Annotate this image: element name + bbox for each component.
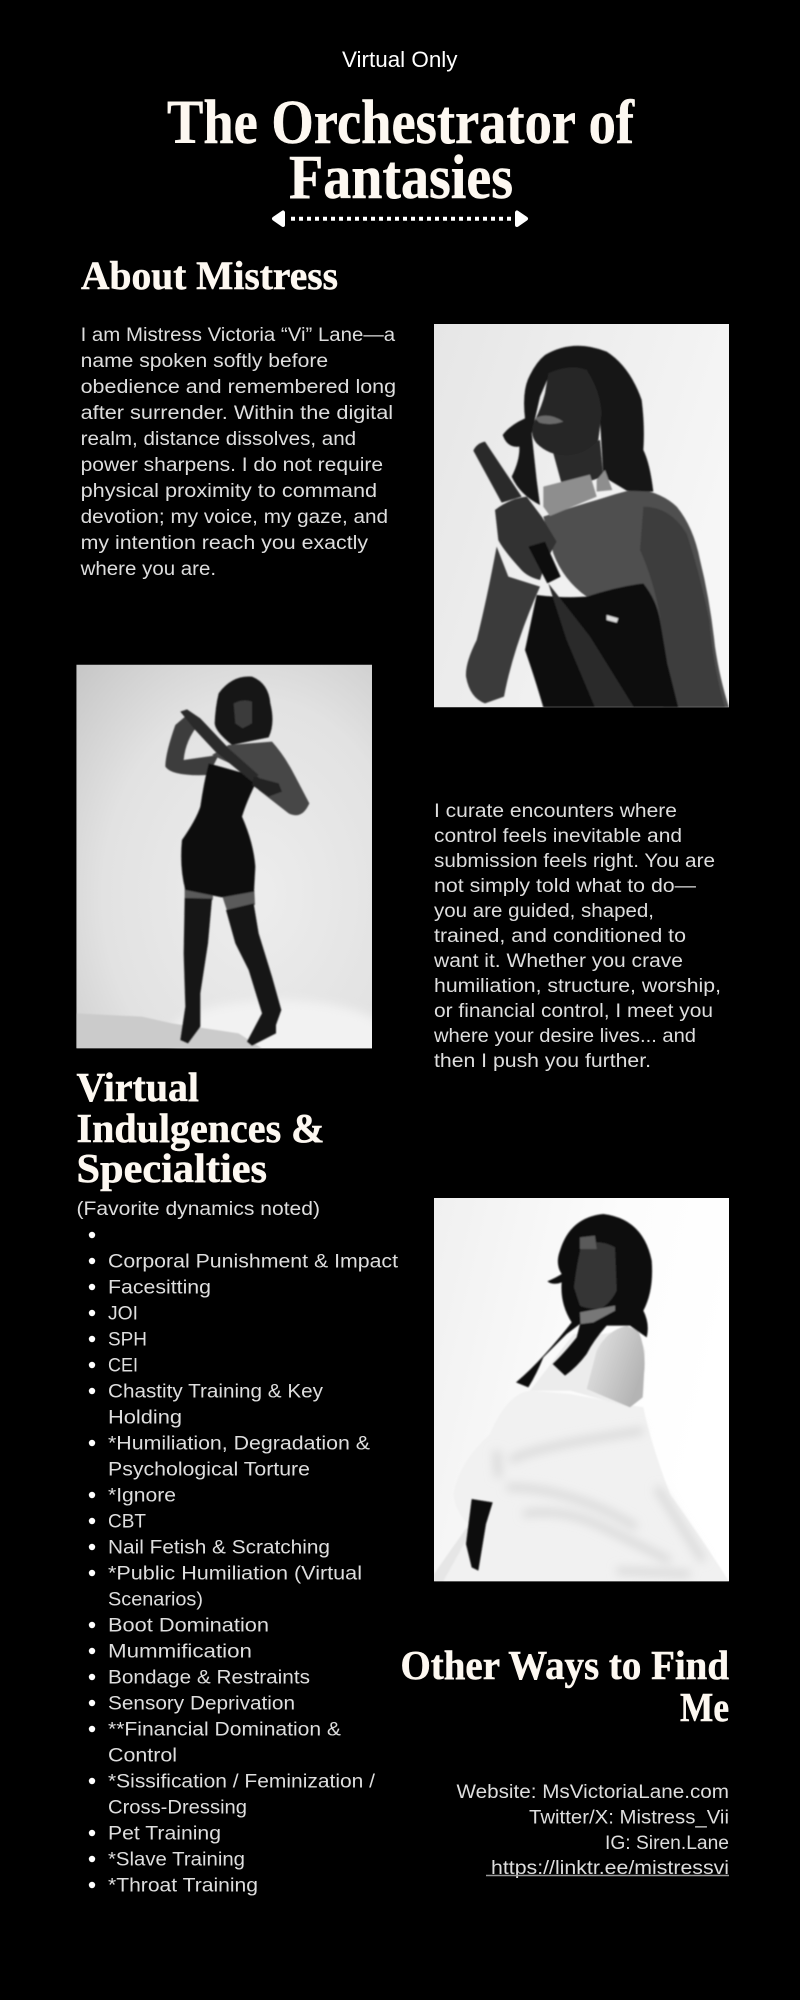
subtitle: Virtual Only: Virtual Only <box>342 47 458 72</box>
text block: about paragraph: realm, distance dissolves, and <box>81 429 356 450</box>
list: specialties: Control <box>108 1746 177 1766</box>
list: specialties: Cross-Dressing <box>108 1798 247 1818</box>
text block: contact details: IG: Siren.Lane <box>605 1833 729 1854</box>
text block: curate paragraph: I curate encounters where <box>434 801 677 822</box>
text block: curate paragraph: trained, and conditioned to <box>434 926 686 947</box>
text block: curate paragraph: humiliation, structure, worship, <box>434 976 721 997</box>
floor shadow <box>76 1013 262 1048</box>
list: specialties: Nail Fetish & Scratching <box>108 1538 330 1558</box>
list: specialties: Holding <box>108 1408 182 1428</box>
list: specialties: *Slave Training <box>108 1850 245 1870</box>
text block: about paragraph: my intention reach you exactly <box>81 533 369 554</box>
list: specialties: Sensory Deprivation <box>108 1694 295 1714</box>
list: specialties: **Financial Domination & <box>108 1720 341 1740</box>
text block: about paragraph: power sharpens. I do not require <box>81 455 383 476</box>
list: specialties: Boot Domination <box>108 1616 269 1636</box>
text block: contact details: Twitter/X: Mistress_Vii <box>529 1808 729 1829</box>
text block: curate paragraph: then I push you further. <box>434 1051 651 1072</box>
bare shoulder and arm <box>587 1326 645 1407</box>
text block: about paragraph: I am Mistress Victoria “Vi” Lane—a <box>81 325 396 346</box>
glove <box>466 1499 493 1571</box>
text block: contact details <box>456 1782 729 1879</box>
strap handle <box>473 442 522 503</box>
thigh bands <box>185 887 214 900</box>
heading: Other Ways to Find Me: Other Ways to Find <box>400 1642 729 1688</box>
neck <box>553 440 603 490</box>
choker <box>580 1306 615 1324</box>
dress <box>181 763 259 897</box>
heading: Other Ways to Find Me <box>400 1642 729 1730</box>
divider: double-headed dotted arrow <box>274 212 526 225</box>
text block: curate paragraph: submission feels right. You are <box>434 851 715 872</box>
text block: about paragraph <box>80 325 396 580</box>
lower arm <box>434 1528 468 1582</box>
list: specialties: SPH <box>108 1330 147 1350</box>
text block: about paragraph: where you are. <box>80 559 216 580</box>
photo: portrait with strap and corset <box>434 324 729 707</box>
note: favorite dynamics: (Favorite dynamics noted) <box>76 1199 320 1220</box>
corset <box>525 583 678 707</box>
text block: contact details: Website: MsVictoriaLane.com <box>456 1782 729 1803</box>
list: specialties: *Humiliation, Degradation & <box>108 1434 370 1454</box>
heading: Virtual Indulgences & Specialties <box>76 1064 324 1191</box>
list: specialties: JOI <box>108 1304 138 1324</box>
face <box>574 1242 617 1309</box>
list: specialties: Scenarios) <box>108 1590 203 1610</box>
face <box>532 367 602 455</box>
heading: About Mistress: About Mistress <box>81 253 338 298</box>
hair <box>215 677 272 745</box>
photo: figure in white fur wrap <box>434 1198 729 1581</box>
fur shading <box>497 1431 703 1574</box>
hair <box>503 346 653 505</box>
text block: curate paragraph: or financial control, I meet you <box>434 1001 713 1022</box>
title <box>167 89 635 212</box>
list: specialties: *Sissification / Feminization / <box>108 1772 376 1792</box>
text block: curate paragraph: not simply told what to do— <box>434 876 696 897</box>
torso and shoulders <box>543 488 729 707</box>
text block: curate paragraph: where your desire lives... and <box>433 1026 696 1047</box>
face <box>234 700 252 728</box>
white top <box>530 1327 645 1407</box>
list: specialties: Mummification <box>108 1642 252 1662</box>
title: Fantasies <box>289 144 513 212</box>
text block: about paragraph: obedience and remembered long <box>81 377 396 398</box>
raised arm <box>165 715 219 775</box>
list: specialties: Corporal Punishment & Impact <box>108 1252 399 1272</box>
heading: Other Ways to Find Me: Me <box>680 1684 729 1730</box>
text block: curate paragraph: you are guided, shaped, <box>434 901 654 922</box>
heading: Virtual Indulgences & Specialties: Virtual <box>76 1064 199 1110</box>
fur wrap <box>443 1391 729 1581</box>
list: specialties: Bondage & Restraints <box>108 1668 310 1688</box>
list: specialties: *Throat Training <box>108 1876 258 1896</box>
strap <box>180 709 259 782</box>
list: specialties: *Public Humiliation (Virtual <box>108 1564 362 1584</box>
heading: Virtual Indulgences & Specialties: Indulgences & <box>76 1105 324 1151</box>
text block: about paragraph: after surrender. Within the digital <box>81 403 393 424</box>
list: specialties: CEI <box>108 1356 138 1376</box>
chest and lowered arm <box>212 742 309 815</box>
photo: full-length standing figure <box>76 664 372 1048</box>
hair <box>516 1214 652 1387</box>
list: specialties: Chastity Training & Key <box>108 1382 324 1402</box>
list: specialties: Psychological Torture <box>108 1460 310 1480</box>
list: specialties: *Ignore <box>108 1486 176 1506</box>
heading: Virtual Indulgences & Specialties: Specialties <box>76 1145 267 1191</box>
boots <box>180 898 212 1043</box>
text block: about paragraph: name spoken softly before <box>81 351 328 372</box>
text block: about paragraph: physical proximity to command <box>81 481 377 502</box>
text block: contact details: https://linktr.ee/mistressvi <box>491 1858 729 1879</box>
title: The Orchestrator of <box>167 89 635 157</box>
text block: about paragraph: devotion; my voice, my gaze, and <box>81 507 388 528</box>
list: specialties: CBT <box>108 1512 146 1532</box>
list: specialties: Pet Training <box>108 1824 221 1844</box>
text block: curate paragraph: want it. Whether you crave <box>433 951 683 972</box>
hand <box>495 497 557 580</box>
text block: curate paragraph <box>433 801 721 1072</box>
text block: curate paragraph: control feels inevitable and <box>434 826 682 847</box>
list: specialties: Facesitting <box>108 1278 211 1298</box>
list: specialties <box>89 1232 399 1896</box>
choker <box>543 475 597 516</box>
forearm <box>466 547 540 703</box>
